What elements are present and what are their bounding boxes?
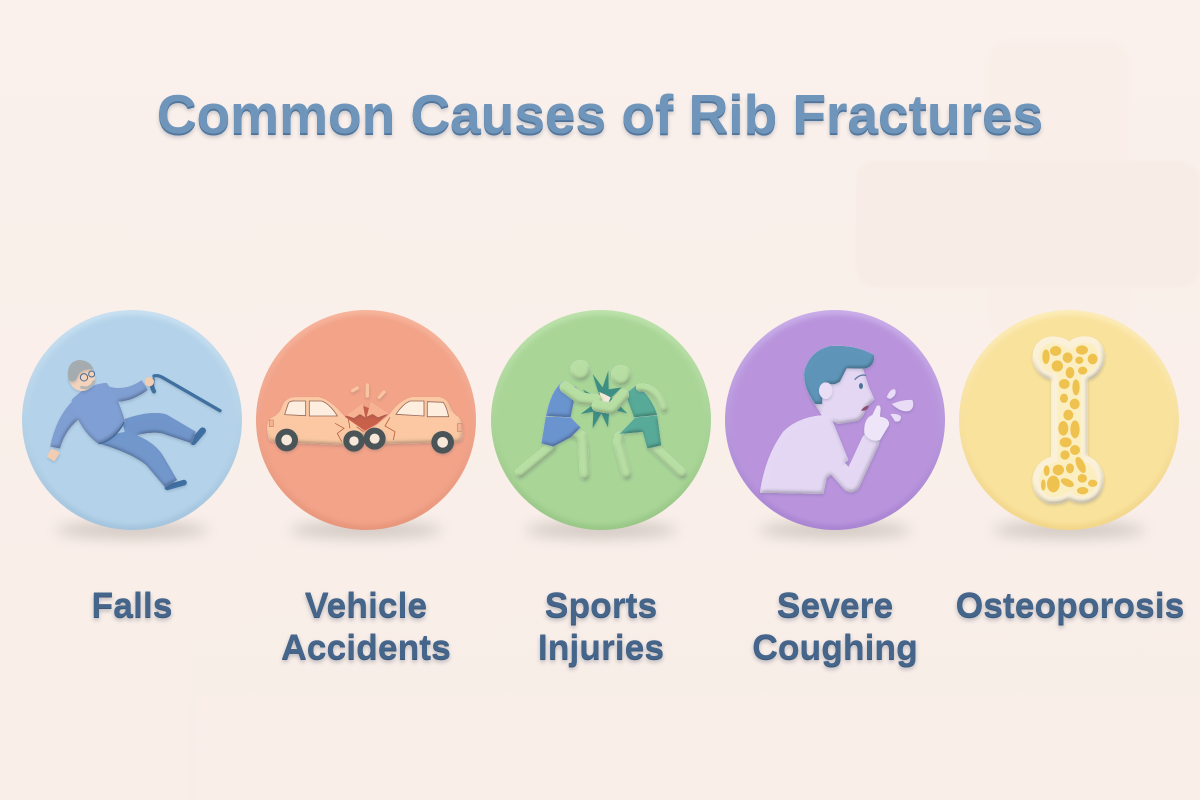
label: sports injuries — [538, 585, 665, 672]
label: falls: Falls — [92, 585, 172, 625]
disc: severe coughing — [725, 310, 945, 530]
icon: two athletes colliding — [520, 360, 682, 475]
label: sports injuries: Sports — [545, 585, 657, 625]
label: vehicle accidents: Accidents — [281, 627, 451, 667]
panel: vehicle accidents — [256, 310, 476, 538]
label: severe coughing: Coughing — [752, 627, 918, 667]
label: osteoporosis: Osteoporosis — [956, 585, 1184, 625]
label: severe coughing: Severe — [777, 585, 893, 625]
disc: vehicle accidents — [256, 310, 476, 530]
icon: person coughing — [760, 346, 913, 494]
icon: elderly person falling with cane — [47, 360, 220, 487]
title: Common Causes of Rib Fractures — [157, 83, 1043, 145]
panel: osteoporosis — [959, 310, 1179, 538]
icon: two cars colliding — [267, 385, 463, 454]
panel: severe coughing — [725, 310, 945, 538]
label: vehicle accidents — [280, 585, 452, 667]
disc: osteoporosis — [959, 310, 1179, 530]
disc: falls — [22, 310, 242, 530]
panel: sports injuries — [491, 310, 711, 538]
label: severe coughing — [752, 585, 918, 672]
label: vehicle accidents: Vehicle — [305, 585, 427, 625]
icon: porous bone — [1036, 340, 1101, 500]
label: sports injuries: Injuries — [538, 627, 664, 667]
disc: sports injuries — [491, 310, 711, 530]
panel: falls — [22, 310, 242, 538]
